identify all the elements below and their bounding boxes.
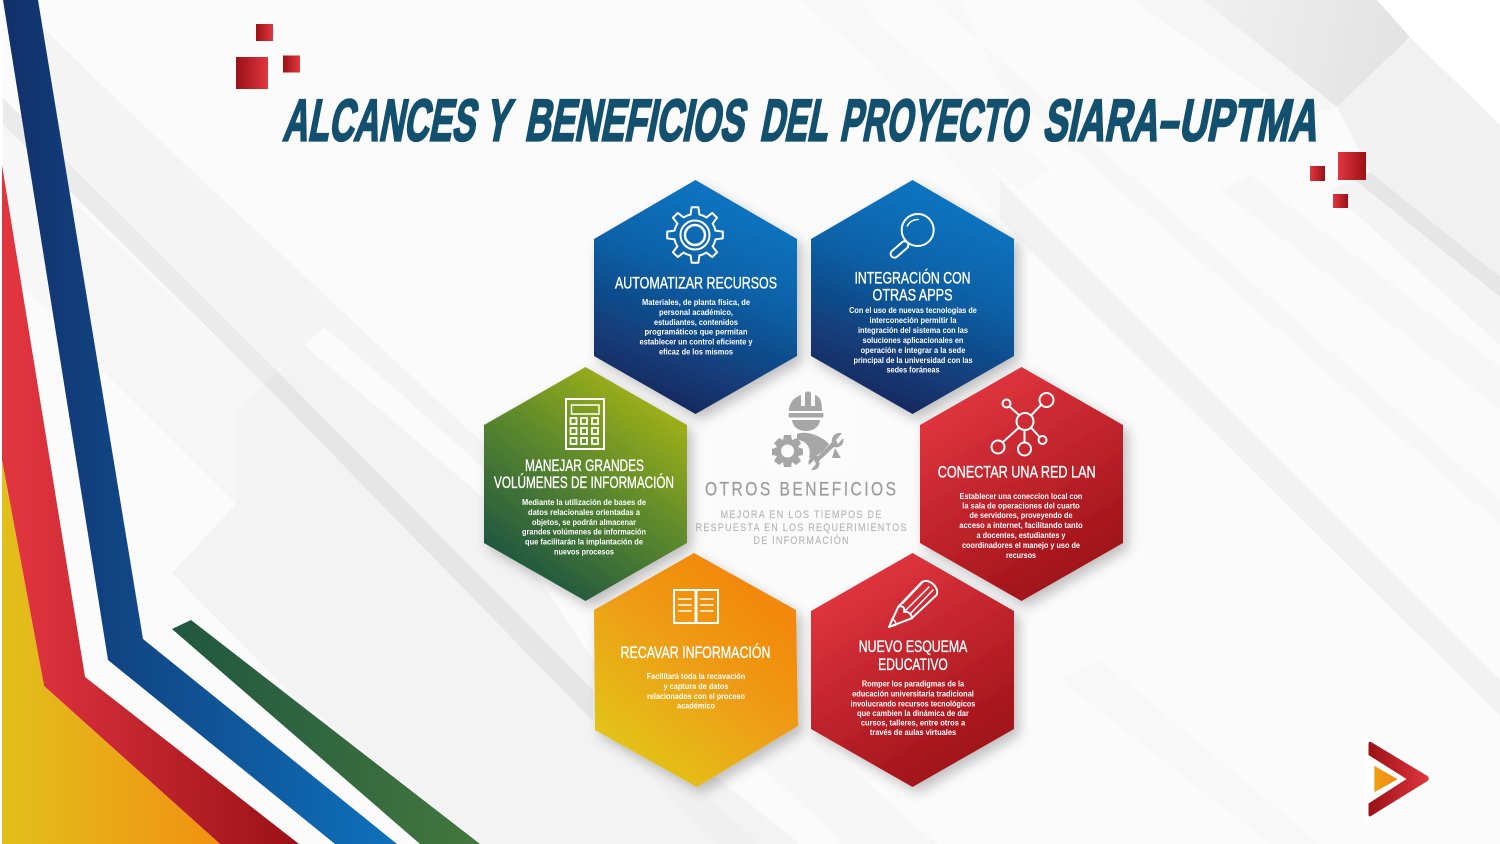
text: integracion description: principal de la universidad con las bbox=[854, 356, 973, 365]
heading: manejar grandes volumenes: MANEJAR GRANDES bbox=[525, 457, 644, 475]
text: integracion description: interconeción permitir la bbox=[870, 316, 957, 325]
text: nuevo esquema description bbox=[851, 679, 976, 737]
heading: recavar informacion: RECAVAR INFORMACIÓN bbox=[620, 643, 770, 662]
heading: manejar grandes volumenes: VOLÚMENES DE INFORMACIÓN bbox=[494, 473, 674, 492]
panel: automatizar recursos bbox=[594, 180, 797, 414]
text: otros beneficios description bbox=[696, 509, 907, 547]
text: otros beneficios description: DE INFORMACIÓN bbox=[753, 533, 849, 547]
icon: pencil bbox=[889, 581, 937, 627]
title: Y bbox=[481, 87, 518, 153]
text: automatizar recursos description: estudiantes, contenidos bbox=[654, 318, 738, 327]
text: manejar description: Mediante la utilización de bases de bbox=[522, 498, 647, 507]
title: DEL bbox=[756, 87, 837, 153]
title: ALCANCES bbox=[279, 87, 484, 153]
text: nuevo esquema description: involucrando recursos tecnológicos bbox=[851, 699, 976, 708]
panel: manejar grandes volumenes bbox=[484, 367, 687, 601]
text: conectar description: a docentes, estudiantes y bbox=[976, 531, 1066, 540]
text: automatizar recursos description bbox=[640, 298, 753, 356]
icon: gear bbox=[667, 207, 723, 263]
text: manejar description: datos relacionales orientadas a bbox=[528, 508, 641, 517]
text: recavar description: Facilitará toda la recavación bbox=[647, 672, 745, 681]
title bbox=[279, 87, 1326, 153]
heading: conectar una red lan: CONECTAR UNA RED LAN bbox=[938, 464, 1096, 482]
text: recavar description: académico bbox=[677, 701, 715, 710]
text: integracion description bbox=[849, 306, 977, 374]
text: otros beneficios description: RESPUESTA EN LOS REQUERIMIENTOS bbox=[696, 522, 907, 534]
panel: integracion con otras apps bbox=[811, 180, 1014, 414]
heading: automatizar recursos: AUTOMATIZAR RECURSOS bbox=[615, 274, 777, 292]
heading: nuevo esquema educativo: NUEVO ESQUEMA bbox=[859, 638, 967, 656]
heading: integracion con otras apps bbox=[854, 268, 970, 304]
panel: conectar una red lan bbox=[920, 367, 1123, 601]
heading: nuevo esquema educativo bbox=[859, 638, 967, 674]
central block: otros beneficios bbox=[696, 390, 907, 547]
text: manejar description: grandes volúmenes de información bbox=[522, 528, 646, 536]
icon: worker with gear and wrench bbox=[767, 390, 849, 470]
text: manejar description: nuevos procesos bbox=[554, 548, 614, 556]
text: automatizar recursos description: eficaz de los mismos bbox=[659, 347, 734, 356]
title: PROYECTO bbox=[836, 87, 1036, 153]
text: nuevo esquema description: que cambien la dinámica de dar bbox=[857, 709, 969, 718]
left coloured stripes bbox=[0, 0, 480, 844]
heading: integracion con otras apps: INTEGRACIÓN CON bbox=[854, 268, 970, 287]
text: conectar description: de servidores, proveyendo de bbox=[970, 511, 1073, 520]
text: manejar description bbox=[522, 498, 647, 556]
icon: open book bbox=[674, 590, 718, 623]
text: nuevo esquema description: cursos, talleres, entre otros a bbox=[861, 718, 966, 727]
icon: network nodes bbox=[992, 393, 1054, 456]
text: nuevo esquema description: educación universitaria tradicional bbox=[852, 689, 974, 698]
title: SIARA bbox=[1039, 87, 1167, 153]
text: nuevo esquema description: través de aulas virtuales bbox=[870, 728, 957, 737]
title: UPTMA bbox=[1175, 87, 1326, 153]
text: nuevo esquema description: Romper los paradigmas de la bbox=[862, 679, 965, 688]
text: automatizar recursos description: establecer un control eficiente y bbox=[640, 337, 753, 346]
text: automatizar recursos description: programáticos que permitan bbox=[644, 328, 748, 337]
text: otros beneficios description: MEJORA EN LOS TIEMPOS DE bbox=[721, 509, 882, 521]
text: automatizar recursos description: personal académico, bbox=[659, 308, 733, 317]
title: BENEFICIOS bbox=[521, 87, 753, 153]
text: conectar description bbox=[959, 492, 1083, 560]
text: automatizar recursos description: Materiales, de planta física, de bbox=[642, 298, 751, 307]
heading: integracion con otras apps: OTRAS APPS bbox=[872, 286, 952, 304]
text: integracion description: sedes foráneas bbox=[886, 365, 940, 374]
text: manejar description: que facilitarán la implantación de bbox=[525, 538, 644, 546]
decoration: red squares top left bbox=[236, 24, 300, 89]
text: integracion description: integración del sistema con las bbox=[858, 326, 968, 335]
text: integracion description: operación e integrar a la sede bbox=[861, 346, 966, 355]
heading: nuevo esquema educativo: EDUCATIVO bbox=[878, 656, 948, 674]
text: conectar description: Establecer una coneccion local con bbox=[960, 492, 1082, 501]
panel: nuevo esquema educativo bbox=[811, 553, 1014, 787]
heading: otros beneficios: OTROS BENEFICIOS bbox=[705, 478, 896, 500]
panel: recavar informacion bbox=[594, 553, 798, 787]
text: conectar description: recursos bbox=[1006, 551, 1036, 560]
text: manejar description: objetos, se podrán almacenar bbox=[532, 518, 636, 527]
icon: calculator bbox=[566, 399, 604, 449]
logo: play arrow bbox=[1366, 738, 1433, 820]
title: – bbox=[1154, 87, 1187, 153]
decoration: red squares top right bbox=[1310, 152, 1366, 208]
text: integracion description: Con el uso de nuevas tecnologías de bbox=[849, 306, 977, 315]
text: recavar description bbox=[647, 672, 745, 710]
icon: magnifying glass bbox=[889, 214, 934, 259]
text: conectar description: la sala de operaciones del cuarto bbox=[962, 501, 1080, 510]
text: conectar description: coordinadores el manejo y uso de bbox=[962, 541, 1080, 550]
text: recavar description: relacionados con el proceso bbox=[647, 692, 745, 701]
text: conectar description: acceso a internet, facilitando tanto bbox=[959, 521, 1083, 530]
text: integracion description: soluciones aplicacionales en bbox=[863, 336, 963, 345]
heading: manejar grandes volumenes bbox=[494, 457, 674, 492]
text: recavar description: y captura de datos bbox=[664, 682, 729, 691]
